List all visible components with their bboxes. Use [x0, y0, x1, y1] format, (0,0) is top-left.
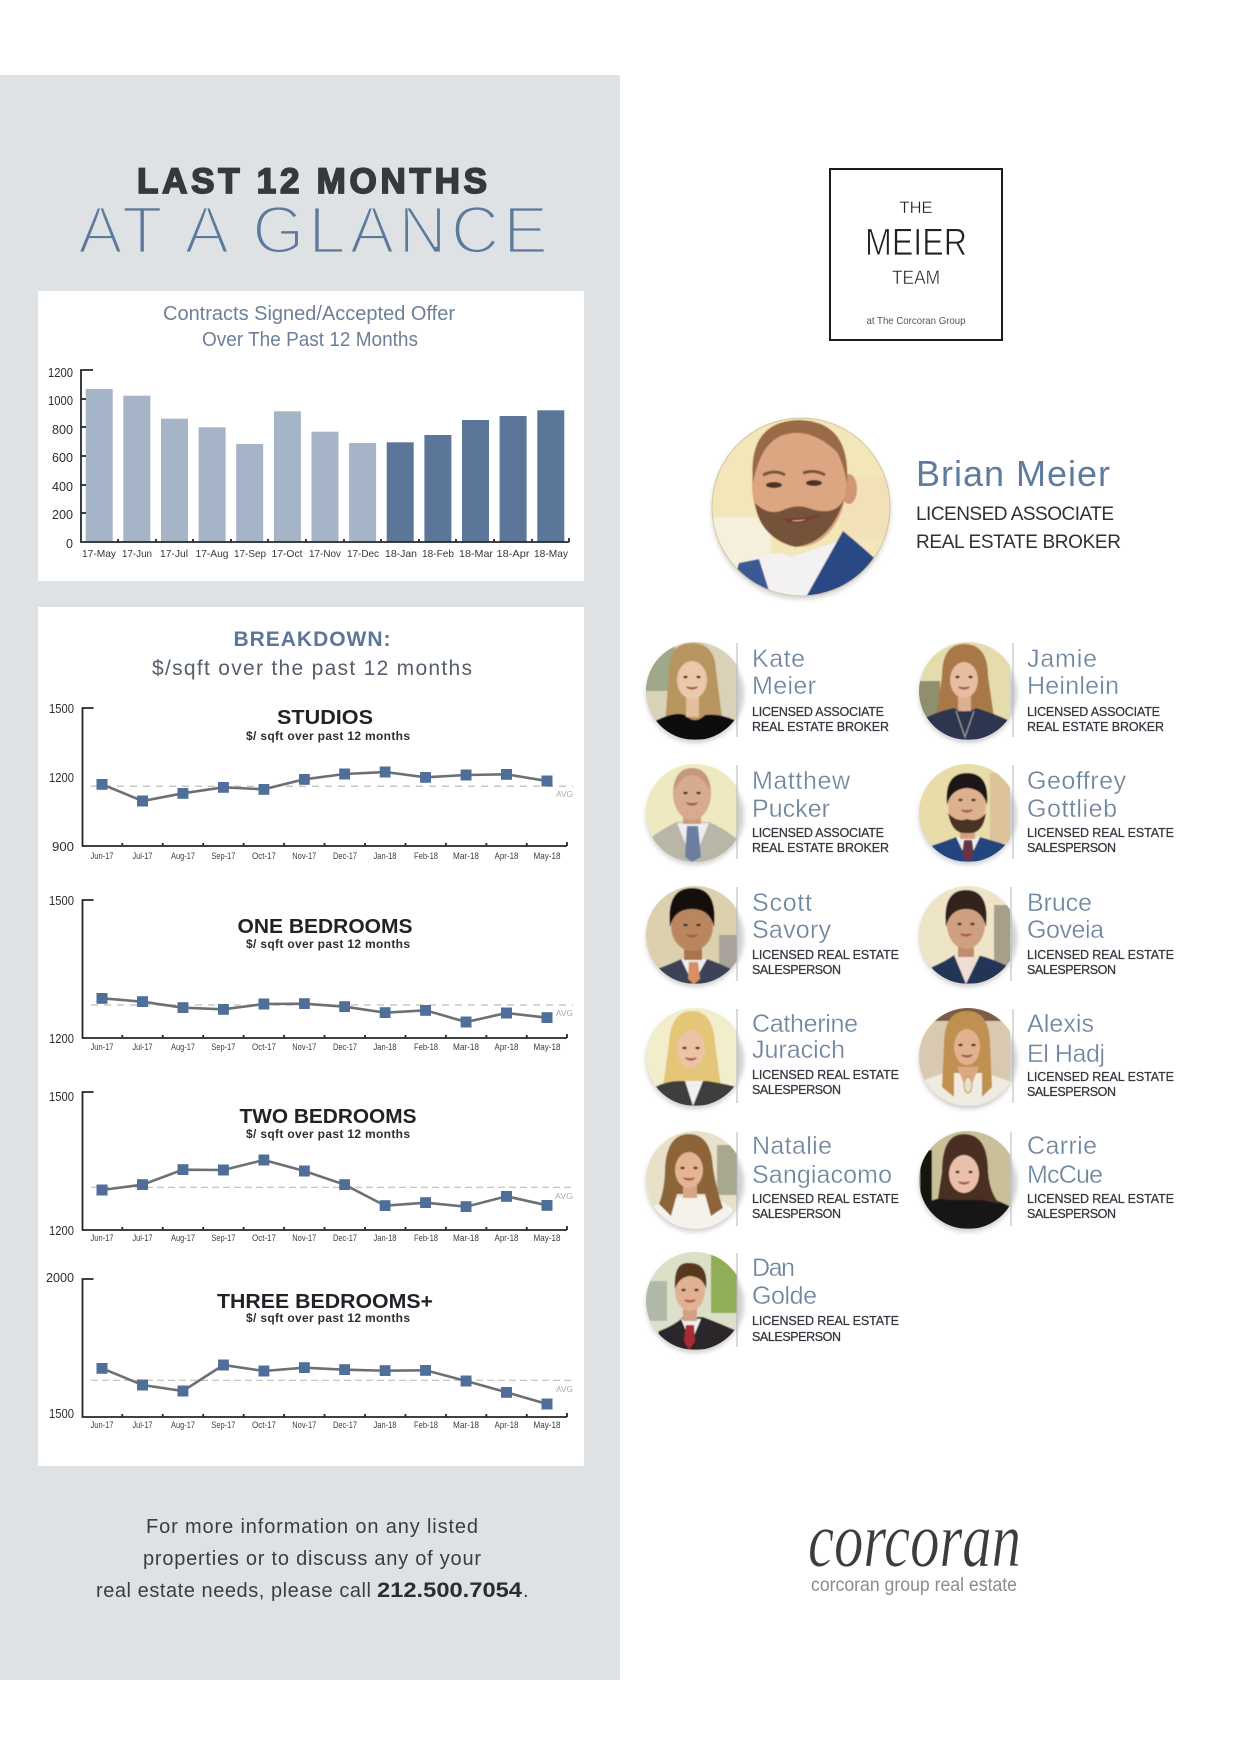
line chart: one bedrooms: $/ sqft over past 12 months	[246, 937, 410, 951]
line chart: two bedrooms: Mar-18	[453, 1233, 479, 1243]
portrait: Catherine Juracich	[645, 1007, 745, 1109]
agent text: Matthew Pucker: LICENSED ASSOCIATE	[752, 826, 884, 840]
line chart: three bedrooms: Aug-17	[171, 1420, 195, 1430]
line chart: two bedrooms: May-18	[534, 1233, 560, 1243]
portrait: Jamie Heinlein	[918, 641, 1018, 743]
line chart: studios: Jan-18	[374, 851, 396, 861]
agent text: Carrie McCue: LICENSED REAL ESTATE	[1027, 1192, 1174, 1206]
agent text: Scott Savory: Scott	[752, 889, 812, 917]
line chart: one bedrooms: Aug-17	[171, 1042, 195, 1052]
line chart: three bedrooms: AVG	[556, 1384, 573, 1394]
bar chart: 18-Feb	[422, 548, 454, 560]
line chart: studios: Apr-18	[494, 851, 518, 861]
bar chart: 18-Mar	[459, 548, 494, 560]
line chart: three bedrooms: Sep-17	[211, 1420, 235, 1430]
agent text: Carrie McCue	[1027, 1132, 1174, 1221]
line chart: one bedrooms: May-18	[534, 1042, 560, 1052]
line chart: one bedrooms: Oct-17	[252, 1042, 276, 1052]
bar chart: 17-Dec	[347, 548, 379, 560]
breakdown heading: BREAKDOWN:	[234, 628, 390, 651]
bar chart: 200	[52, 508, 73, 522]
bar chart: 600	[52, 451, 73, 465]
line chart: two bedrooms: $/ sqft over past 12 months	[246, 1127, 410, 1141]
chart heading: Contracts Signed/Accepted Offer	[163, 303, 455, 325]
bar chart: 17-May	[82, 548, 117, 560]
agent text: Matthew Pucker: Pucker	[752, 795, 830, 823]
line chart: three bedrooms: May-18	[534, 1420, 560, 1430]
chart heading	[163, 303, 455, 351]
agent text: Dan Golde: Dan	[752, 1254, 795, 1282]
agent text: Bruce Goveia: LICENSED REAL ESTATE	[1027, 948, 1174, 962]
logo: The Meier Team: TEAM	[892, 268, 940, 289]
footer contact text: For more information on any listed	[146, 1516, 478, 1538]
agent text: Alexis El Hadj: Alexis	[1027, 1010, 1094, 1038]
line chart: two bedrooms: Jul-17	[132, 1233, 152, 1243]
line chart: three bedrooms: Apr-18	[494, 1420, 518, 1430]
line chart: one bedrooms: Mar-18	[453, 1042, 479, 1052]
agent text: Natalie Sangiacomo: SALESPERSON	[752, 1207, 841, 1221]
chart heading: Over The Past 12 Months	[202, 329, 418, 351]
logo: The Meier Team: MEIER	[865, 222, 967, 264]
agent text: Alexis El Hadj: El Hadj	[1027, 1040, 1105, 1068]
bar chart: 800	[52, 423, 73, 437]
line chart: two bedrooms: 1500	[49, 1090, 74, 1104]
agent text: Natalie Sangiacomo	[752, 1132, 899, 1221]
agent text: Kate Meier: Meier	[752, 672, 816, 700]
portrait: Brian Meier	[711, 417, 891, 600]
line chart: one bedrooms: Nov-17	[292, 1042, 316, 1052]
breakdown heading: $/sqft over the past 12 months	[152, 657, 472, 680]
line chart: three bedrooms: Oct-17	[252, 1420, 276, 1430]
logo: corcoran	[808, 1496, 1021, 1596]
agent text: Jamie Heinlein: Jamie	[1027, 645, 1097, 673]
line chart: two bedrooms: Dec-17	[333, 1233, 357, 1243]
agent text: Matthew Pucker: REAL ESTATE BROKER	[752, 841, 889, 855]
agent text: Kate Meier: LICENSED ASSOCIATE	[752, 705, 884, 719]
agent text: Catherine Juracich: Catherine	[752, 1010, 858, 1038]
agent text: Dan Golde	[752, 1254, 899, 1344]
line chart: one bedrooms: ONE BEDROOMS	[238, 916, 412, 938]
logo: The Meier Team: at The Corcoran Group	[866, 316, 966, 327]
line chart: one bedrooms: Sep-17	[211, 1042, 235, 1052]
agent text: Geoffrey Gottlieb	[1027, 767, 1174, 855]
agent text: Kate Meier	[752, 645, 889, 734]
footer contact text	[96, 1516, 529, 1602]
agent text: Bruce Goveia	[1027, 889, 1174, 977]
agent text: Catherine Juracich: Juracich	[752, 1036, 845, 1064]
line chart: one bedrooms: AVG	[556, 1008, 573, 1018]
bar chart: 18-Apr	[496, 548, 530, 560]
agent text: Geoffrey Gottlieb: Gottlieb	[1027, 795, 1117, 823]
line chart: two bedrooms: Aug-17	[171, 1233, 195, 1243]
line chart: three bedrooms: Jun-17	[90, 1420, 114, 1430]
footer contact text: .	[523, 1580, 529, 1602]
agent text: Catherine Juracich: LICENSED REAL ESTATE	[752, 1068, 899, 1082]
agent text: Jamie Heinlein: REAL ESTATE BROKER	[1027, 720, 1164, 734]
bar chart: 17-Jul	[160, 548, 188, 560]
line chart: studios: Oct-17	[252, 851, 276, 861]
agent text: Kate Meier: Kate	[752, 645, 805, 673]
line chart: two bedrooms: AVG	[555, 1191, 573, 1201]
line chart: studios: May-18	[534, 851, 560, 861]
agent text: Carrie McCue: Carrie	[1027, 1132, 1097, 1160]
line chart: studios: Aug-17	[171, 851, 195, 861]
panel: contracts bar chart	[38, 291, 584, 581]
bar chart: 18-May	[534, 548, 569, 560]
bar chart: 1200	[48, 366, 73, 380]
bar chart: 0	[66, 537, 73, 551]
line chart: studios: Jul-17	[132, 851, 152, 861]
portrait: Dan Golde	[645, 1251, 745, 1353]
agent text: Geoffrey Gottlieb: SALESPERSON	[1027, 841, 1116, 855]
line chart: two bedrooms: Jan-18	[374, 1233, 396, 1243]
agent text: Matthew Pucker	[752, 767, 889, 855]
line chart: three bedrooms	[46, 1271, 573, 1430]
bar chart: 17-Oct	[272, 548, 303, 560]
agent text: Jamie Heinlein: Heinlein	[1027, 672, 1119, 700]
bar chart: 17-Jun	[122, 548, 152, 560]
agent text: Geoffrey Gottlieb: LICENSED REAL ESTATE	[1027, 826, 1174, 840]
line chart: three bedrooms: Jul-17	[132, 1420, 152, 1430]
line chart: three bedrooms: THREE BEDROOMS+	[217, 1291, 433, 1313]
portrait: Scott Savory	[645, 885, 745, 987]
agent text: Carrie McCue: McCue	[1027, 1161, 1103, 1189]
agent text: Matthew Pucker: Matthew	[752, 767, 851, 795]
lead agent text: LICENSED ASSOCIATE	[916, 504, 1114, 525]
agent text: Carrie McCue: SALESPERSON	[1027, 1207, 1116, 1221]
portrait: Geoffrey Gottlieb	[918, 763, 1018, 865]
bar chart: 400	[52, 480, 73, 494]
portrait: Alexis El Hadj	[918, 1007, 1018, 1109]
bar chart	[48, 366, 569, 560]
line chart: three bedrooms: Nov-17	[292, 1420, 316, 1430]
line chart: one bedrooms	[49, 894, 573, 1052]
line chart: three bedrooms: Feb-18	[414, 1420, 438, 1430]
line chart: studios: Sep-17	[211, 851, 235, 861]
breakdown heading	[152, 628, 472, 680]
panel: breakdown	[38, 607, 584, 1466]
line chart: studios: Jun-17	[90, 851, 114, 861]
agent text: Natalie Sangiacomo: LICENSED REAL ESTATE	[752, 1192, 899, 1206]
portrait: Carrie McCue	[918, 1130, 1018, 1232]
agent text: Bruce Goveia: Bruce	[1027, 889, 1092, 917]
agent text: Natalie Sangiacomo: Natalie	[752, 1132, 832, 1160]
footer contact text: 212.500.7054	[377, 1579, 522, 1602]
panel: left grey column	[0, 75, 620, 1680]
title: AT A GLANCE	[78, 193, 548, 268]
agent text: Catherine Juracich: SALESPERSON	[752, 1083, 841, 1097]
logo: The Meier Team: THE	[900, 198, 932, 217]
agent text: Bruce Goveia: SALESPERSON	[1027, 963, 1116, 977]
agent text: Jamie Heinlein: LICENSED ASSOCIATE	[1027, 705, 1160, 719]
footer contact text: properties or to discuss any of your	[143, 1548, 481, 1570]
line chart: one bedrooms: Jun-17	[90, 1042, 114, 1052]
logo: corcoran: corcoran group real estate	[811, 1575, 1017, 1596]
line chart: two bedrooms: Apr-18	[494, 1233, 518, 1243]
agent text: Dan Golde: SALESPERSON	[752, 1330, 841, 1344]
line chart: two bedrooms: Oct-17	[252, 1233, 276, 1243]
bar chart: 17-Nov	[309, 548, 342, 560]
agent text: Scott Savory: SALESPERSON	[752, 963, 841, 977]
bar chart: 18-Jan	[385, 548, 417, 560]
title: LAST 12 MONTHS	[137, 162, 487, 201]
line chart: three bedrooms: Dec-17	[333, 1420, 357, 1430]
bar chart: 1000	[48, 394, 73, 408]
lead agent text	[916, 453, 1121, 553]
line chart: three bedrooms: Jan-18	[374, 1420, 396, 1430]
line chart: two bedrooms: Feb-18	[414, 1233, 438, 1243]
line chart: studios: STUDIOS	[277, 707, 373, 729]
line chart: one bedrooms: Jan-18	[374, 1042, 396, 1052]
line chart: two bedrooms: Nov-17	[292, 1233, 316, 1243]
portrait: Kate Meier	[645, 641, 745, 743]
agent text: Catherine Juracich	[752, 1010, 899, 1097]
agent text: Scott Savory: Savory	[752, 916, 832, 944]
line chart: one bedrooms: Dec-17	[333, 1042, 357, 1052]
line chart: one bedrooms: 1200	[49, 1032, 74, 1046]
line chart: one bedrooms: Feb-18	[414, 1042, 438, 1052]
agent text: Dan Golde: Golde	[752, 1282, 817, 1310]
agent text: Natalie Sangiacomo: Sangiacomo	[752, 1161, 892, 1189]
agent text: Alexis El Hadj	[1027, 1010, 1174, 1099]
line chart: two bedrooms: Jun-17	[90, 1233, 114, 1243]
line chart: studios: 900	[52, 840, 74, 854]
line chart: studios: 1200	[49, 771, 74, 785]
footer contact text: real estate needs, please call	[96, 1580, 371, 1602]
line chart: studios: AVG	[556, 789, 573, 799]
portrait: Matthew Pucker	[645, 763, 745, 865]
line chart: studios: Nov-17	[292, 851, 316, 861]
line chart: studios: 1500	[49, 702, 74, 716]
line chart: three bedrooms: Mar-18	[453, 1420, 479, 1430]
line chart: two bedrooms: 1200	[49, 1224, 74, 1238]
line chart: three bedrooms: 2000	[46, 1271, 74, 1285]
portrait: Bruce Goveia	[918, 885, 1018, 987]
agent text: Alexis El Hadj: LICENSED REAL ESTATE	[1027, 1070, 1174, 1084]
line chart: one bedrooms: Jul-17	[132, 1042, 152, 1052]
logo: The Meier Team	[830, 169, 1002, 340]
bar chart: 17-Aug	[196, 548, 229, 560]
line chart: two bedrooms: TWO BEDROOMS	[240, 1106, 416, 1128]
portrait: Natalie Sangiacomo	[645, 1130, 745, 1232]
line chart: studios: Feb-18	[414, 851, 438, 861]
line chart: studios: $/ sqft over past 12 months	[246, 729, 410, 743]
agent text: Bruce Goveia: Goveia	[1027, 916, 1104, 944]
line chart: studios	[49, 702, 573, 861]
agent text: Dan Golde: LICENSED REAL ESTATE	[752, 1314, 899, 1328]
agent text: Scott Savory	[752, 889, 899, 977]
lead agent text: Brian Meier	[916, 453, 1110, 494]
bar chart: 17-Sep	[234, 548, 266, 560]
line chart: one bedrooms: 1500	[49, 894, 74, 908]
line chart: three bedrooms: 1500	[49, 1407, 74, 1421]
agent text: Alexis El Hadj: SALESPERSON	[1027, 1085, 1116, 1099]
line chart: two bedrooms: Sep-17	[211, 1233, 235, 1243]
agent text: Jamie Heinlein	[1027, 645, 1164, 734]
line chart: two bedrooms	[49, 1090, 573, 1243]
line chart: studios: Mar-18	[453, 851, 479, 861]
agent text: Geoffrey Gottlieb: Geoffrey	[1027, 767, 1126, 795]
agent text: Scott Savory: LICENSED REAL ESTATE	[752, 948, 899, 962]
logo: corcoran: corcoran	[808, 1496, 1021, 1583]
line chart: studios: Dec-17	[333, 851, 357, 861]
agent text: Kate Meier: REAL ESTATE BROKER	[752, 720, 889, 734]
line chart: one bedrooms: Apr-18	[494, 1042, 518, 1052]
lead agent text: REAL ESTATE BROKER	[916, 532, 1121, 553]
line chart: three bedrooms: $/ sqft over past 12 months	[246, 1311, 410, 1325]
